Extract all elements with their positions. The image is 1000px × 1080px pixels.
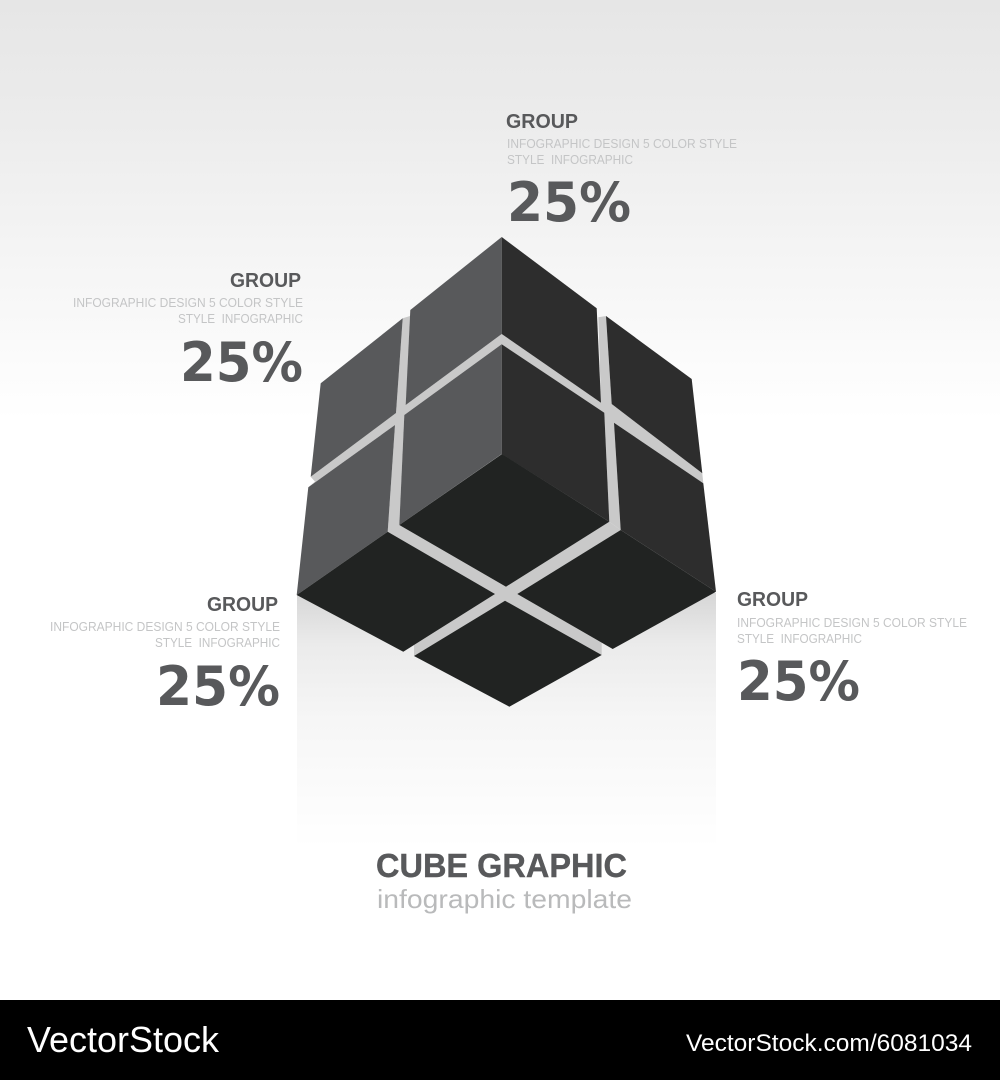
label: right group: STYLE INFOGRAPHIC	[737, 631, 862, 646]
label: upper left group: INFOGRAPHIC DESIGN 5 COLOR STYLE	[73, 295, 303, 310]
back right block	[502, 237, 601, 403]
centre right block	[502, 344, 609, 522]
footer image id: VectorStock.com/6081034	[686, 1030, 972, 1057]
background gradient	[0, 0, 1000, 420]
label: right group: INFOGRAPHIC DESIGN 5 COLOR STYLE	[737, 615, 967, 630]
far left block	[311, 318, 403, 477]
subtitle: infographic template	[377, 884, 632, 914]
bottom diamond	[414, 601, 602, 707]
lower left block	[297, 425, 395, 595]
footer bar	[0, 1000, 1000, 1080]
label: right group: GROUP	[737, 589, 808, 611]
label: top group: GROUP	[506, 111, 578, 133]
lower right block	[614, 423, 716, 592]
label: upper left group	[73, 270, 303, 394]
label: top group: INFOGRAPHIC DESIGN 5 COLOR STYLE	[507, 136, 737, 151]
back left block	[406, 237, 502, 405]
label: top group: STYLE INFOGRAPHIC	[507, 152, 633, 167]
gap lines	[308, 316, 703, 656]
centre bottom diamond	[399, 454, 609, 587]
label: lower left group: INFOGRAPHIC DESIGN 5 COLOR STYLE	[50, 619, 280, 634]
label: lower left group: 25%	[156, 655, 280, 718]
label: lower left group: STYLE INFOGRAPHIC	[155, 635, 280, 650]
title: CUBE GRAPHIC	[376, 847, 627, 884]
label: lower left group: GROUP	[207, 594, 278, 616]
label: top group	[506, 111, 737, 234]
footer brand: VectorStock	[27, 1019, 220, 1060]
bottom right diamond	[517, 530, 716, 649]
label: lower left group	[50, 594, 280, 718]
label: upper left group: STYLE INFOGRAPHIC	[178, 311, 303, 326]
cube shadow	[297, 593, 716, 848]
cube graphic	[297, 237, 716, 707]
bottom left diamond	[297, 532, 495, 652]
label: upper left group: GROUP	[230, 270, 301, 292]
label: upper left group: 25%	[180, 331, 303, 394]
far right block	[606, 316, 702, 473]
label: top group: 25%	[507, 171, 631, 234]
label: right group	[737, 589, 967, 713]
centre left block	[399, 344, 502, 525]
label: right group: 25%	[737, 650, 860, 713]
